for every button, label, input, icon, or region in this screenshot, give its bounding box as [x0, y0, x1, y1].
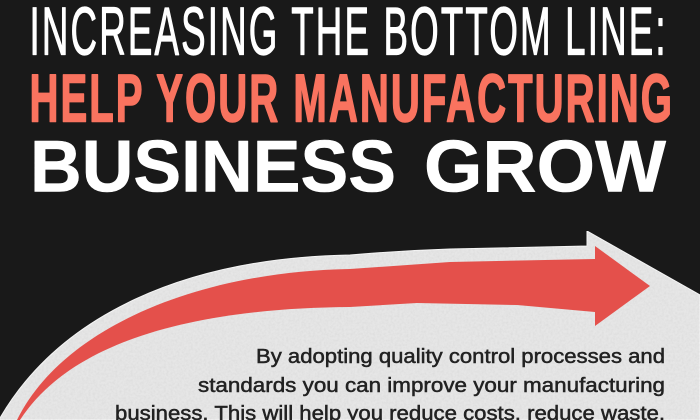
paragraph line 2: standards you can improve your manufacturing — [198, 375, 665, 397]
title line 2: HELP YOUR MANUFACTURING — [30, 59, 672, 136]
intro paragraph — [115, 346, 665, 420]
title block — [30, 0, 672, 208]
paper arrow panel — [0, 231, 700, 420]
paragraph line 1: By adopting quality control processes and — [256, 346, 665, 368]
red growth arrow — [17, 246, 650, 420]
title line 3 — [30, 126, 666, 208]
word: grow: GROW — [424, 126, 666, 208]
paper shape — [0, 231, 700, 420]
word: business: BUSINESS — [30, 126, 396, 208]
